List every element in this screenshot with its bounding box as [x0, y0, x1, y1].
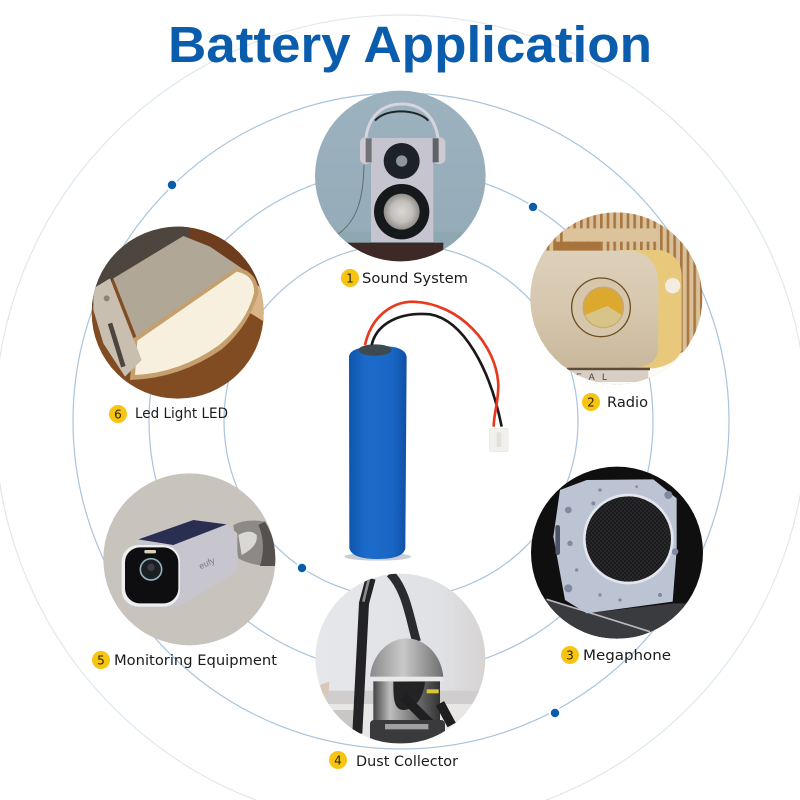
- label: 1 Sound System: 1: [346, 272, 354, 286]
- photo: retro radio: [530, 212, 702, 384]
- label: 6 Led Light LED: Led Light LED: [135, 406, 228, 422]
- battery top: [358, 344, 392, 356]
- label: 2 Radio: [582, 393, 648, 411]
- photo: vacuum cleaner: [315, 574, 486, 744]
- label: 5 Monitoring Equipment: 5: [97, 654, 105, 668]
- ring marker dots: [167, 180, 560, 718]
- label: 2 Radio: Radio: [607, 395, 648, 411]
- connector: [489, 428, 508, 452]
- label: 4 Dust Collector: [329, 751, 458, 770]
- photo: speaker with headphones: [315, 90, 486, 262]
- panel: sound system: [315, 90, 486, 287]
- label: 4 Dust Collector: 4: [334, 754, 342, 768]
- photo: security camera: eufy: [197, 555, 217, 571]
- panel: megaphone: [531, 466, 703, 664]
- battery: [344, 302, 508, 561]
- label: 1 Sound System: Sound System: [362, 271, 468, 287]
- label: 3 Megaphone: 3: [566, 648, 574, 662]
- battery body: [349, 346, 407, 559]
- panel: monitoring equipment: [92, 473, 277, 669]
- panel: dust collector: [315, 574, 486, 769]
- label: 6 Led Light LED: [109, 405, 228, 423]
- lead wires: [365, 302, 502, 427]
- photo: security camera: [103, 473, 276, 646]
- photo: LED ceiling light: [92, 226, 264, 399]
- label: 3 Megaphone: [561, 646, 671, 664]
- label: 3 Megaphone: Megaphone: [583, 648, 671, 664]
- battery shadow: [344, 553, 411, 561]
- title: Battery Application: [168, 16, 652, 73]
- label: 5 Monitoring Equipment: Monitoring Equipment: [114, 653, 277, 669]
- panel: led light: [92, 226, 264, 423]
- photo: retro radio: FAL: [576, 372, 615, 382]
- label: 6 Led Light LED: 6: [114, 408, 122, 422]
- photo: portable speaker: [531, 466, 703, 639]
- label: 4 Dust Collector: Dust Collector: [356, 754, 458, 770]
- label: 2 Radio: 2: [587, 396, 595, 410]
- panel: radio: [530, 212, 702, 411]
